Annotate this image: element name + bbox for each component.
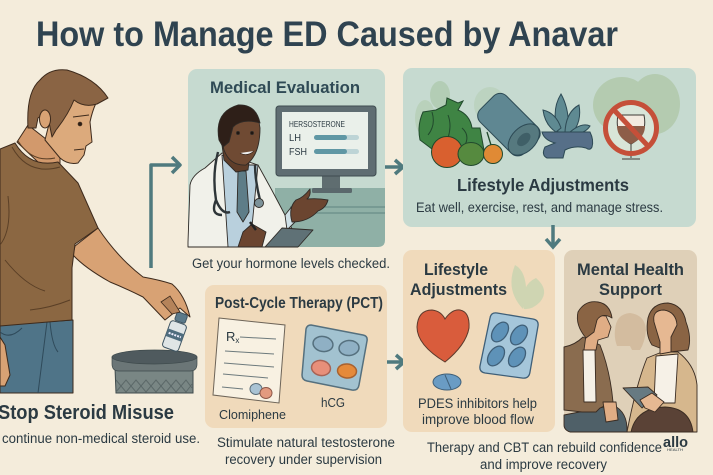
panel: PDE5 inhibitors bbox=[403, 250, 555, 432]
heading: mental health support: Support bbox=[599, 280, 662, 299]
heading: lifestyle adjustments second: Lifestyle bbox=[424, 260, 488, 279]
icon: prescription: R bbox=[226, 329, 235, 344]
label: clomiphene: Clomiphene bbox=[219, 408, 286, 422]
icon: blister pack bbox=[480, 313, 538, 378]
icon: monitor with hormone levels bbox=[276, 106, 376, 193]
illustration: therapist bbox=[623, 303, 697, 432]
caption: hormone levels: Get your hormone levels checked. bbox=[192, 256, 390, 271]
icon: loose pill bbox=[433, 374, 461, 390]
arrow: to lifestyle adjustments bbox=[385, 160, 403, 174]
icon: heart bbox=[417, 310, 469, 362]
panel: lifestyle adjustments bbox=[403, 68, 696, 227]
text: PDE5 description: improve blood flow bbox=[422, 412, 534, 427]
text: PDE5 description: PDES inhibitors help bbox=[418, 396, 537, 411]
icon: steroid vial bbox=[162, 311, 191, 352]
text: lifestyle description: Eat well, exercise, rest, and manage stress. bbox=[416, 199, 663, 215]
arrow: to PDE5 panel bbox=[387, 355, 404, 369]
heading: medical evaluation: Medical Evaluation bbox=[210, 78, 360, 97]
caption: stimulate recovery: Stimulate natural testosterone bbox=[217, 435, 395, 450]
icon: prescription bbox=[213, 318, 285, 403]
icon: monitor with hormone levels: FSH bbox=[289, 147, 307, 158]
icon: leaves bbox=[511, 265, 544, 309]
caption: therapy and CBT bbox=[427, 440, 662, 472]
icon: monitor with hormone levels: LH bbox=[289, 133, 301, 144]
arrow: down to support panels bbox=[546, 225, 560, 247]
logo: allo health: allo bbox=[663, 434, 688, 451]
text: discontinue use: continue non-medical steroid use. bbox=[2, 431, 200, 446]
illustration: patient bbox=[564, 302, 627, 432]
heading: lifestyle adjustments second bbox=[410, 260, 507, 299]
icon: vegetables bbox=[419, 98, 502, 168]
caption: therapy and CBT: and improve recovery bbox=[480, 457, 607, 472]
logo: allo health: HEALTH bbox=[667, 448, 684, 452]
icon: thought head bbox=[615, 313, 646, 350]
icon: hCG blister pack bbox=[302, 325, 367, 390]
heading: stop steroid misuse: Stop Steroid Misuse bbox=[0, 401, 174, 424]
panel: medical evaluation bbox=[188, 69, 385, 247]
desk bbox=[275, 188, 385, 247]
icon: prescription: x bbox=[235, 336, 239, 345]
illustration: doctor bbox=[188, 105, 328, 247]
panel: stop steroid misuse bbox=[0, 70, 200, 446]
icon: monitor with hormone levels: HERSOSTERONE bbox=[289, 120, 345, 129]
panel: mental health support bbox=[564, 250, 697, 432]
caption: stimulate recovery bbox=[217, 435, 395, 467]
icon: potted plant bbox=[542, 94, 593, 158]
text: PDE5 description bbox=[418, 396, 537, 427]
caption: stimulate recovery: recovery under supervision bbox=[225, 452, 382, 467]
arrow: to medical evaluation bbox=[151, 157, 180, 268]
icon: exercise mat bbox=[474, 90, 545, 161]
panel: post-cycle therapy bbox=[205, 285, 387, 428]
heading: post-cycle therapy: Post-Cycle Therapy (PCT) bbox=[215, 295, 383, 312]
icon: no alcohol bbox=[606, 102, 656, 159]
illustration: trash can bbox=[112, 350, 197, 393]
heading: mental health support bbox=[577, 260, 684, 299]
caption: therapy and CBT: Therapy and CBT can rebuild confidence bbox=[427, 440, 662, 455]
illustration: man discarding vial bbox=[0, 70, 190, 393]
heading: lifestyle adjustments: Lifestyle Adjustments bbox=[457, 175, 629, 195]
title: How to Manage ED Caused by Anavar bbox=[36, 15, 618, 54]
label: hCG: hCG bbox=[321, 396, 345, 410]
heading: mental health support: Mental Health bbox=[577, 260, 684, 279]
heading: lifestyle adjustments second: Adjustments bbox=[410, 280, 507, 299]
